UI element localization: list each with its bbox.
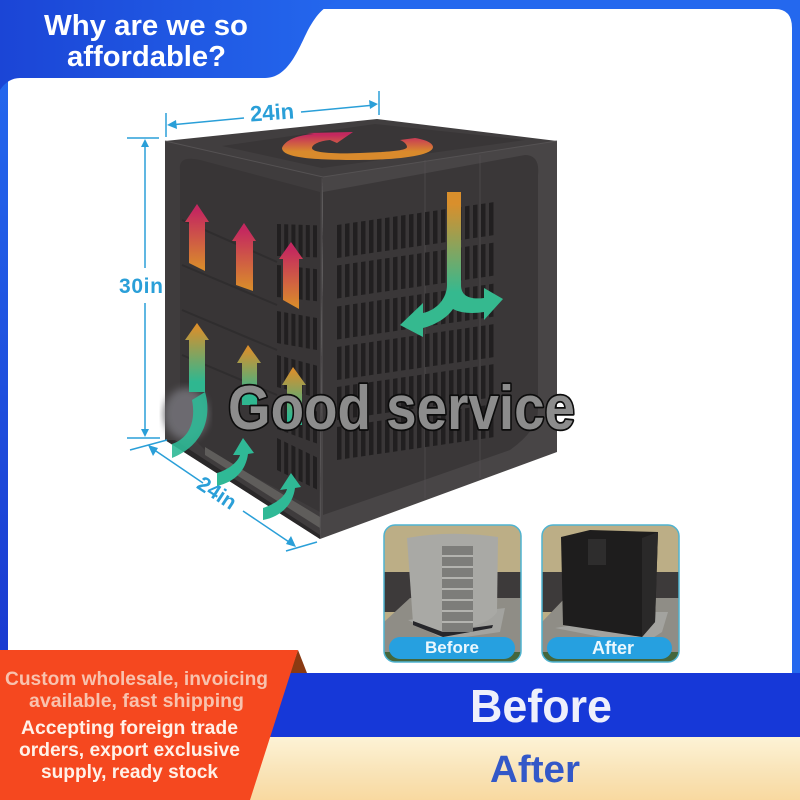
red promo panel: available, fast shipping [29,691,244,712]
inner shell right [323,155,538,515]
airflow arrow: split exhaust [400,192,503,337]
airflow arrows: hot upper left [185,204,303,309]
top face [165,119,557,177]
red promo panel: Custom wholesale, invoicing [5,669,268,690]
product: covered air conditioner [164,119,557,539]
dimension: height: 30in [119,275,163,298]
left panel faint louvres [182,220,277,395]
photo: after [542,525,679,662]
photo: before [384,525,521,662]
red promo panel: orders, export exclusive [19,740,240,761]
dimension: top width [166,91,379,137]
dimension: bottom depth: 24in [193,472,241,515]
fold shadow [290,650,307,673]
left face [165,141,323,539]
band: After: After [490,749,580,791]
right face [320,141,557,539]
title banner: affordable? [67,41,226,73]
inner shell left [180,159,320,512]
band: Before: Before [470,680,612,732]
dimension: top width: 24in [249,98,295,127]
right grille [337,218,495,444]
airflow arrows: green intake [172,392,301,520]
airflow arrow: rotating top [282,132,433,160]
label pill: Before: Before [425,638,479,657]
airflow arrows: warm lower left [185,323,306,425]
band: Before [260,673,800,737]
smudge [164,388,208,440]
red promo panel: supply, ready stock [41,762,218,783]
overlay text: Good service: Good service [228,374,575,443]
label pill: After: After [592,638,634,658]
title banner: Why are we so [44,10,248,42]
red promo panel [0,650,298,800]
dimension: height [119,138,163,438]
left grille [277,240,320,475]
band: After [240,737,800,800]
red promo panel: Accepting foreign trade [21,718,238,739]
seams [320,155,480,530]
title banner [0,0,345,90]
dimension: bottom depth [130,440,317,551]
base strip [205,447,320,528]
